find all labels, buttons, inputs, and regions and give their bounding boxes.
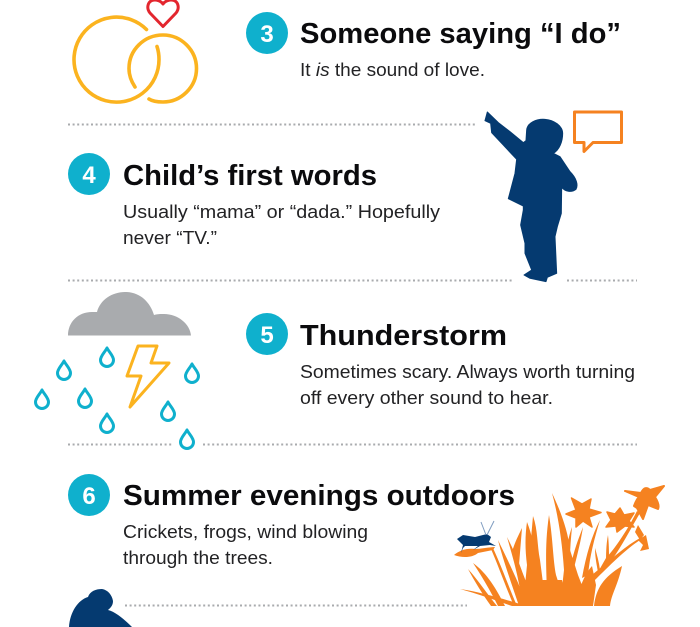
item 3 description: It is the sound of love. bbox=[300, 60, 485, 80]
item 6 description: through the trees. bbox=[123, 548, 273, 568]
item 4 badge bbox=[68, 153, 110, 195]
item 5 badge bbox=[246, 313, 288, 355]
item 4 heading: Child’s first words bbox=[123, 160, 377, 192]
item 4 badge: 4 bbox=[82, 162, 96, 189]
item 4 description: Usually “mama” or “dada.” Hopefully bbox=[123, 202, 440, 222]
flower 1 bbox=[566, 498, 601, 527]
item 5 description: off every other sound to hear. bbox=[300, 388, 553, 408]
item 3 badge: 3 bbox=[260, 21, 274, 48]
item 5 badge: 5 bbox=[260, 322, 274, 349]
item 6 badge bbox=[68, 474, 110, 516]
item 5 description: Sometimes scary. Always worth turning bbox=[300, 362, 635, 382]
item 6 description: Crickets, frogs, wind blowing bbox=[123, 522, 368, 542]
icon: rain drops bbox=[36, 348, 198, 448]
icon: lightning bolt bbox=[127, 346, 169, 407]
item 6 badge: 6 bbox=[82, 483, 96, 510]
flower 3 bbox=[625, 486, 664, 519]
item 5 heading: Thunderstorm bbox=[300, 320, 507, 352]
icon: speech bubble bbox=[574, 112, 622, 152]
item 6 description bbox=[123, 522, 368, 568]
icon: cricket bbox=[457, 521, 496, 553]
icon: rain cloud bbox=[68, 292, 191, 336]
item 6 heading: Summer evenings outdoors bbox=[123, 480, 515, 512]
item 3 heading: Someone saying “I do” bbox=[300, 18, 621, 50]
flower buds bbox=[635, 525, 649, 551]
item 3 badge bbox=[246, 12, 288, 54]
icon: wedding rings bbox=[74, 17, 196, 102]
icon: silhouette at bottom bbox=[69, 589, 132, 627]
item 4 description: never “TV.” bbox=[123, 228, 217, 248]
icon: heart bbox=[148, 0, 178, 26]
flower 2 bbox=[606, 508, 634, 532]
item 5 description bbox=[300, 362, 635, 408]
icon: grass and flowers bbox=[454, 486, 664, 606]
item 4 description bbox=[123, 202, 440, 248]
icon: child silhouette pointing bbox=[485, 112, 577, 282]
